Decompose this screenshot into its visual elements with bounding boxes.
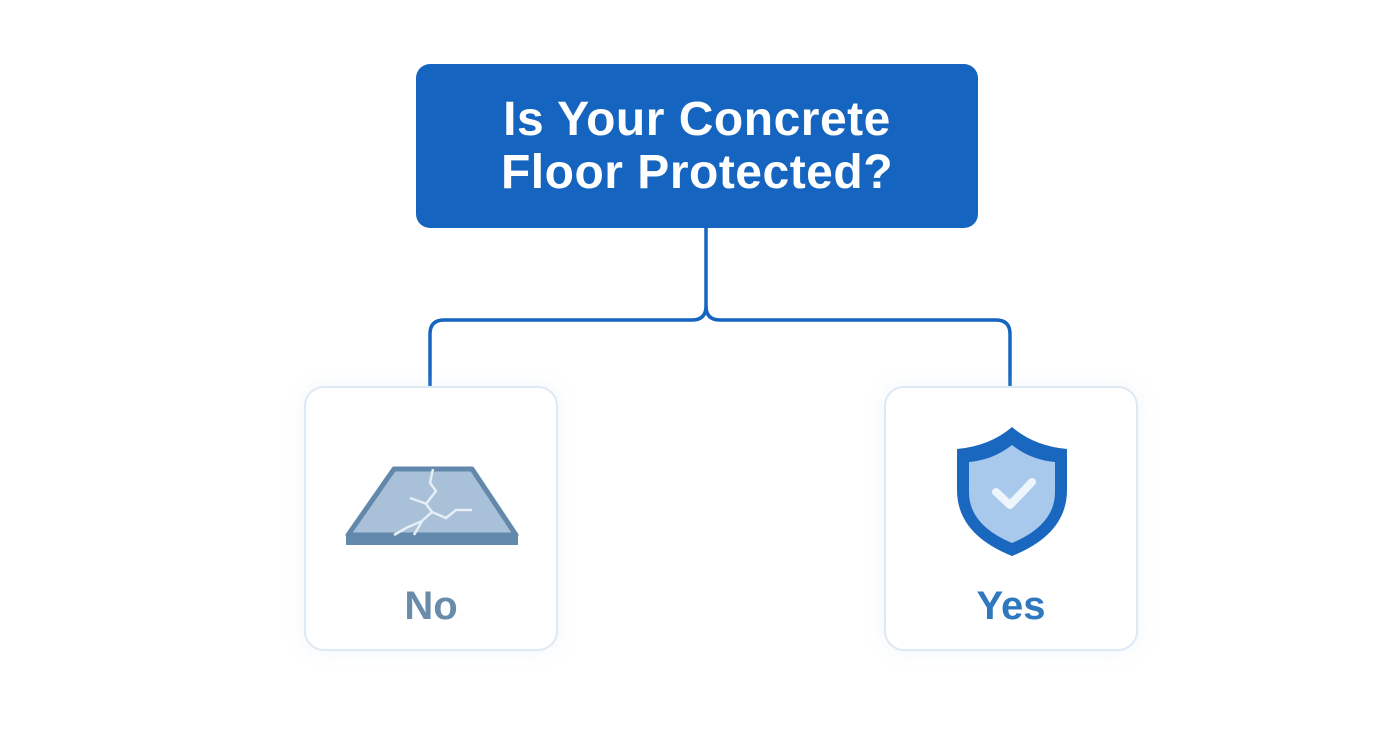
title: Is Your Concrete	[503, 93, 891, 146]
panel: Yes	[884, 386, 1138, 651]
icon: cracked concrete slab	[346, 466, 518, 545]
title	[416, 64, 978, 228]
title: Floor Protected?	[501, 146, 893, 199]
label: No: No	[404, 584, 458, 628]
icon: shield with check	[957, 427, 1067, 556]
label: Yes: Yes	[977, 584, 1045, 628]
panel: No	[304, 386, 558, 651]
